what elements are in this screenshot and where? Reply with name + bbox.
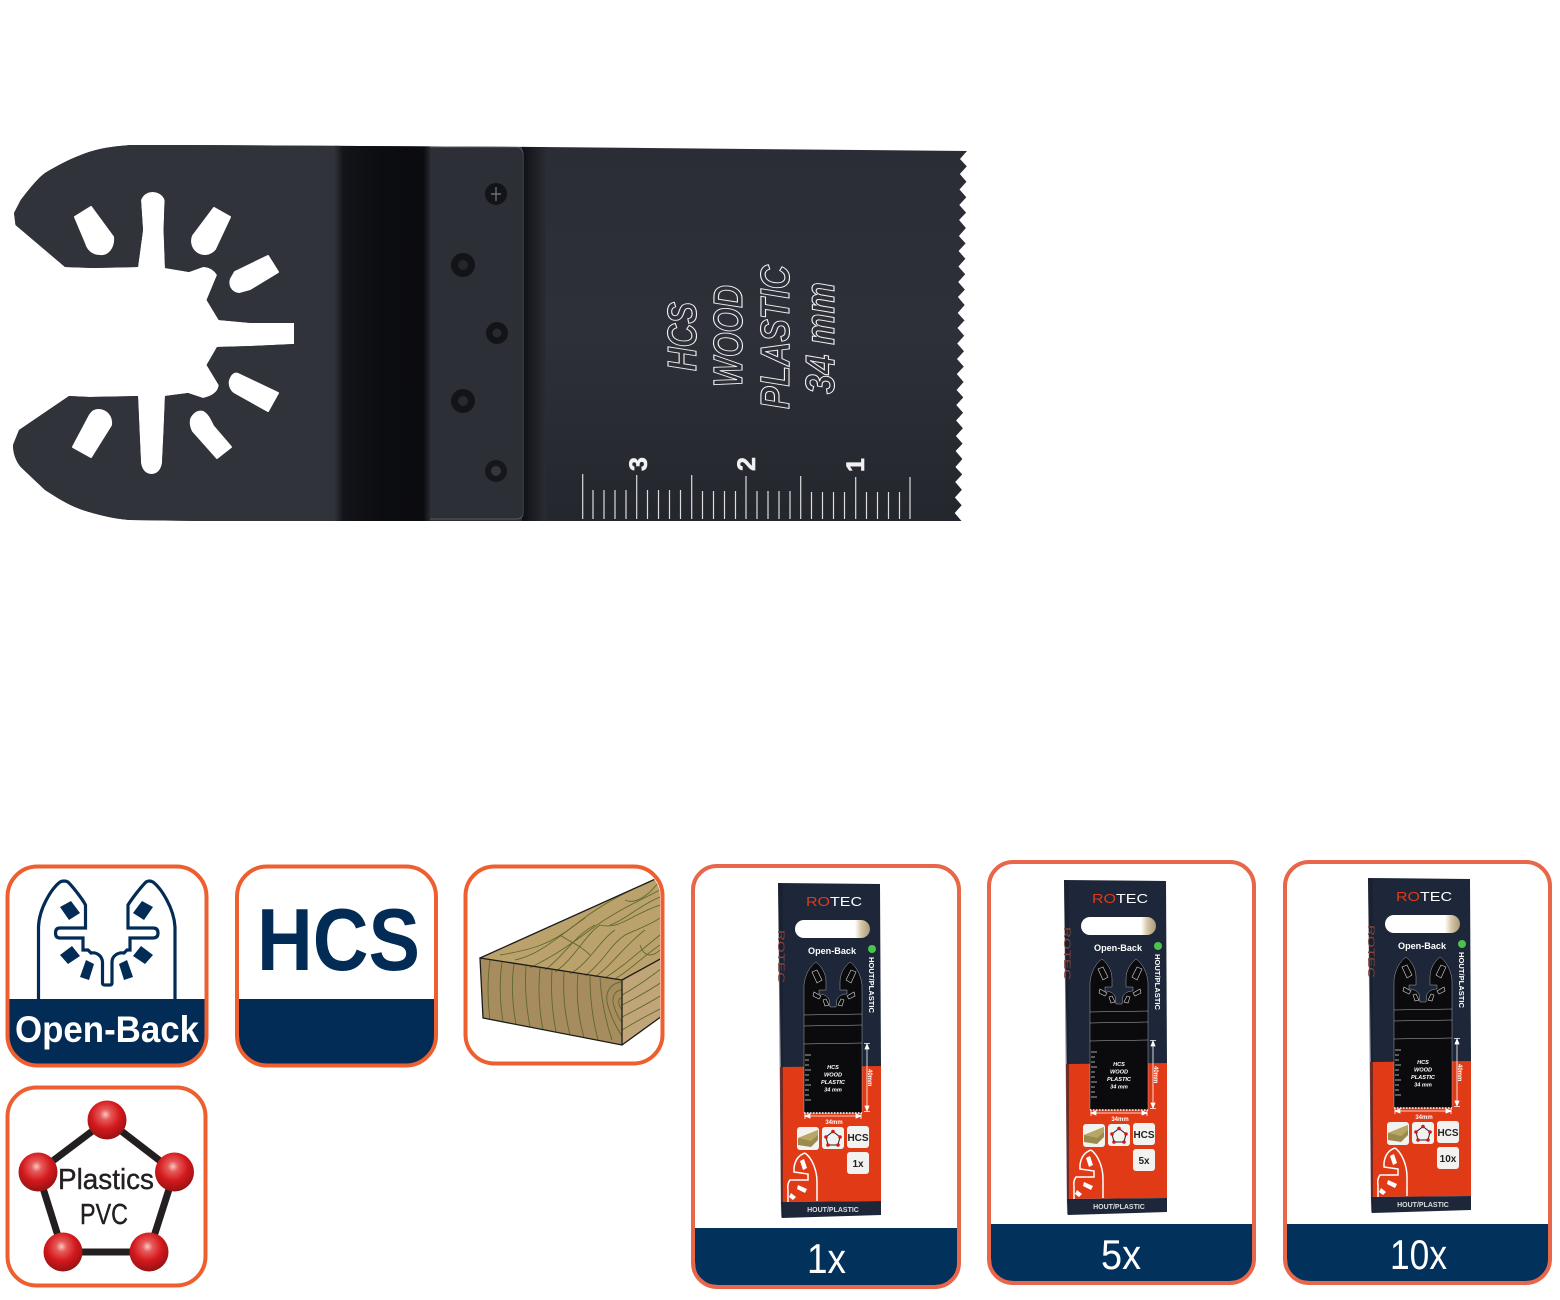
product package: 1x: [852, 1159, 864, 1170]
product package: HCS: [847, 1133, 869, 1144]
Plastics PVC label: Plastics: [58, 1164, 154, 1196]
badge: HCS: [237, 866, 436, 1066]
pack panel: 1x: [693, 866, 959, 1287]
product package: HOUT/PLASTIC: [1457, 952, 1466, 1009]
pack panel: 10x: [1285, 862, 1550, 1283]
rivets: [451, 183, 508, 482]
icon: wooden plank: [480, 876, 662, 1045]
quantity label: 1x: [807, 1235, 846, 1282]
blade engraved text: 34 mm: [797, 282, 843, 394]
pack panel: 5x: [989, 862, 1254, 1283]
saw blade photo: [0, 140, 980, 530]
product package: 5x: [1138, 1156, 1150, 1167]
badge: Plastics PVC: [8, 1088, 206, 1286]
icon: pentagon molecule: [18, 1100, 194, 1272]
blade engraved text: PLASTIC: [752, 264, 798, 409]
product package: HCS: [1417, 1060, 1429, 1066]
blade engraved text: HCS: [659, 302, 705, 371]
product package: RO TEC: [806, 894, 862, 909]
product package: 34 mm: [824, 1088, 842, 1094]
product package: PLASTIC: [1411, 1075, 1436, 1081]
product package: [1062, 880, 1167, 1215]
ruler scale: [583, 474, 910, 519]
product package: Open-Back: [808, 946, 857, 957]
product package: HCS: [1113, 1062, 1125, 1068]
product package: 34 mm: [1110, 1084, 1128, 1090]
product package: Open-Back: [1398, 941, 1447, 952]
product package: 34 mm: [1414, 1082, 1432, 1088]
product package: 40mm: [1152, 1066, 1158, 1083]
product package: RO TEC: [1396, 889, 1452, 904]
quantity label: 5x: [1101, 1231, 1141, 1278]
product package: ROTEC: [1366, 925, 1376, 979]
product package: WOOD: [1110, 1070, 1128, 1076]
icon: open-back blade outline: [38, 881, 175, 999]
product package: HOUT/PLASTIC: [1153, 954, 1162, 1011]
HCS label: HCS: [257, 890, 420, 989]
product package: [776, 883, 881, 1218]
product package: HCS: [1133, 1130, 1155, 1141]
product package: ROTEC: [1062, 927, 1072, 981]
product package: HOUT/PLASTIC: [1397, 1202, 1449, 1209]
product package: HOUT/PLASTIC: [807, 1207, 859, 1214]
ruler numbers: 3: [625, 457, 653, 471]
product package: 34mm: [1415, 1115, 1433, 1121]
Plastics PVC label: PVC: [80, 1199, 128, 1231]
product package: 34mm: [1111, 1117, 1129, 1123]
blade engraved text: WOOD: [705, 285, 751, 387]
product package: [1366, 878, 1471, 1213]
product package: WOOD: [824, 1072, 842, 1078]
product package: 40mm: [1456, 1064, 1462, 1081]
product package: PLASTIC: [1107, 1077, 1132, 1083]
product package: RO TEC: [1092, 891, 1148, 906]
badge: wood: [466, 866, 662, 1064]
product package: 40mm: [866, 1069, 872, 1086]
product package: HOUT/PLASTIC: [867, 957, 876, 1014]
product package: 10x: [1440, 1154, 1457, 1165]
product package: Open-Back: [1094, 943, 1143, 954]
product package: 34mm: [825, 1120, 843, 1126]
blade engraved text: [659, 264, 843, 409]
quantity label: 10x: [1390, 1231, 1447, 1278]
ruler numbers: 1: [842, 458, 870, 472]
product package: ROTEC: [776, 930, 786, 984]
product package: HOUT/PLASTIC: [1093, 1204, 1145, 1211]
product package: HCS: [1437, 1128, 1459, 1139]
ruler numbers: 2: [733, 457, 761, 471]
blade mounting slots: [73, 207, 278, 458]
Plastics PVC label: [58, 1164, 154, 1231]
ruler numbers: [625, 457, 870, 472]
product package: PLASTIC: [821, 1080, 846, 1086]
product package: HCS: [827, 1065, 839, 1071]
Open-Back label: Open-Back: [15, 1009, 199, 1050]
badge: Open-Back: [8, 866, 206, 1066]
product package: WOOD: [1414, 1068, 1432, 1074]
